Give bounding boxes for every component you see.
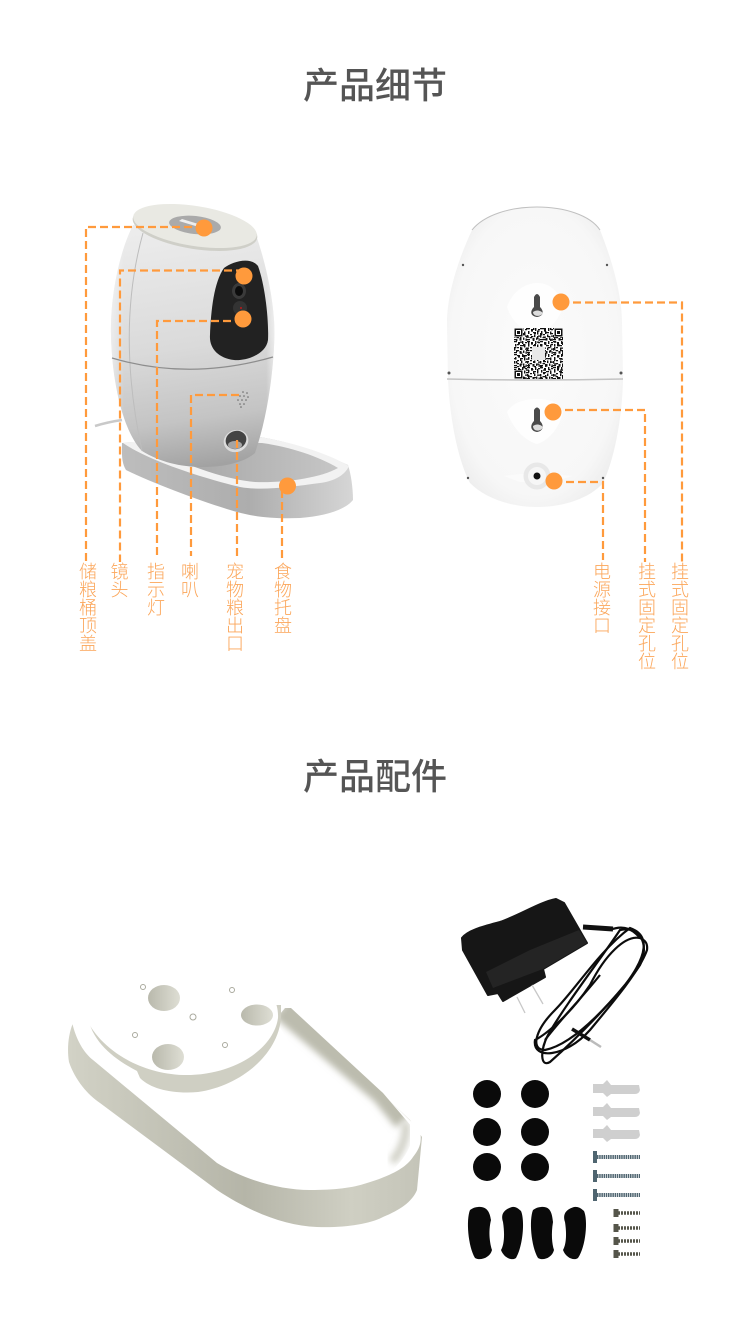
callout: speaker: [181, 395, 239, 600]
label: storage lid: 桶: [79, 598, 97, 618]
upper mounting plate: [507, 283, 563, 334]
label: power port: 口: [593, 616, 611, 636]
label: lower mounting hole: 定: [638, 616, 656, 636]
outer side wall: [68, 1008, 422, 1227]
plate holes: [148, 985, 273, 1070]
label: storage lid: 储: [79, 562, 97, 582]
long screws: [595, 1151, 640, 1201]
label: lens: 头: [110, 580, 128, 600]
label: lens: 镜: [110, 562, 128, 582]
callout: storage lid: [79, 220, 212, 654]
label: food tray: 托: [274, 598, 292, 618]
round plate: [84, 961, 281, 1092]
label: speaker: 叭: [181, 580, 199, 600]
food outlet: [220, 426, 252, 456]
power adapter: [462, 899, 647, 1063]
label: storage lid: 顶: [79, 616, 97, 636]
title: product details: 产品细节: [303, 65, 447, 106]
curved rubber pads: [468, 1207, 586, 1259]
callout: food tray: [274, 478, 296, 636]
label: food outlet: 物: [226, 580, 244, 600]
tray base accessory: [68, 960, 422, 1227]
label: indicator light: 示: [147, 580, 165, 600]
label: upper mounting hole: 固: [671, 598, 689, 618]
label: upper mounting hole: 位: [671, 652, 689, 672]
label: food outlet: 宠: [226, 562, 244, 582]
storage lid: [129, 196, 261, 259]
top edge: [472, 207, 600, 230]
power cable: [95, 420, 122, 426]
back seam: [129, 233, 143, 451]
rear view of feeder: [447, 207, 623, 507]
lower mounting plate: [507, 399, 563, 444]
label: speaker: 喇: [181, 562, 199, 582]
label: power port: 接: [593, 598, 611, 618]
label: food outlet: 出: [226, 616, 244, 636]
wall anchors: [593, 1080, 640, 1142]
waist seam: [447, 379, 623, 380]
callout: indicator light: [147, 310, 252, 618]
callout: food outlet: [226, 440, 244, 654]
feeder body: [111, 225, 274, 467]
label: upper mounting hole: 挂: [671, 562, 689, 582]
label: indicator light: 指: [147, 562, 165, 582]
label: lower mounting hole: 固: [638, 598, 656, 618]
label: upper mounting hole: 孔: [671, 634, 689, 654]
rubber dots: [473, 1080, 549, 1181]
label: upper mounting hole: 定: [671, 616, 689, 636]
label: food tray: 盘: [274, 616, 292, 636]
plate pegs: [132, 984, 234, 1048]
label: lower mounting hole: 式: [638, 580, 656, 600]
callout: upper mounting hole: [552, 294, 689, 672]
label: power port: 源: [593, 580, 611, 600]
label: lower mounting hole: 位: [638, 652, 656, 672]
label: food outlet: 粮: [226, 598, 244, 618]
cable strain relief: [583, 927, 613, 929]
waist seam: [112, 357, 273, 369]
label: food tray: 食: [274, 562, 292, 582]
callout: power port: [546, 472, 611, 636]
label: food outlet: 口: [226, 634, 244, 654]
top surface: [72, 960, 421, 1190]
adapter housing: [462, 899, 587, 1001]
lens: [232, 283, 247, 315]
QR code: [514, 328, 563, 379]
camera window: [210, 261, 268, 360]
label: upper mounting hole: 式: [671, 580, 689, 600]
adapter cable coil: [535, 928, 647, 1063]
food tray: [122, 437, 353, 518]
label: food tray: 物: [274, 580, 292, 600]
label: indicator light: 灯: [147, 598, 165, 618]
side screws: [448, 264, 622, 479]
short screws: [616, 1209, 640, 1258]
product front view: [95, 196, 353, 518]
inner wall: [282, 1008, 406, 1162]
power port: [504, 462, 572, 490]
plug pins: [517, 985, 543, 1013]
label: lower mounting hole: 孔: [638, 634, 656, 654]
callout: lens: [110, 268, 252, 600]
speaker holes: [237, 391, 249, 408]
label: power port: 电: [593, 562, 611, 582]
label: lower mounting hole: 挂: [638, 562, 656, 582]
title: product accessories: 产品配件: [303, 756, 447, 797]
label: storage lid: 粮: [79, 580, 97, 600]
label: storage lid: 盖: [79, 634, 97, 654]
callout: lower mounting hole: [544, 404, 656, 672]
DC tip: [572, 1029, 601, 1047]
